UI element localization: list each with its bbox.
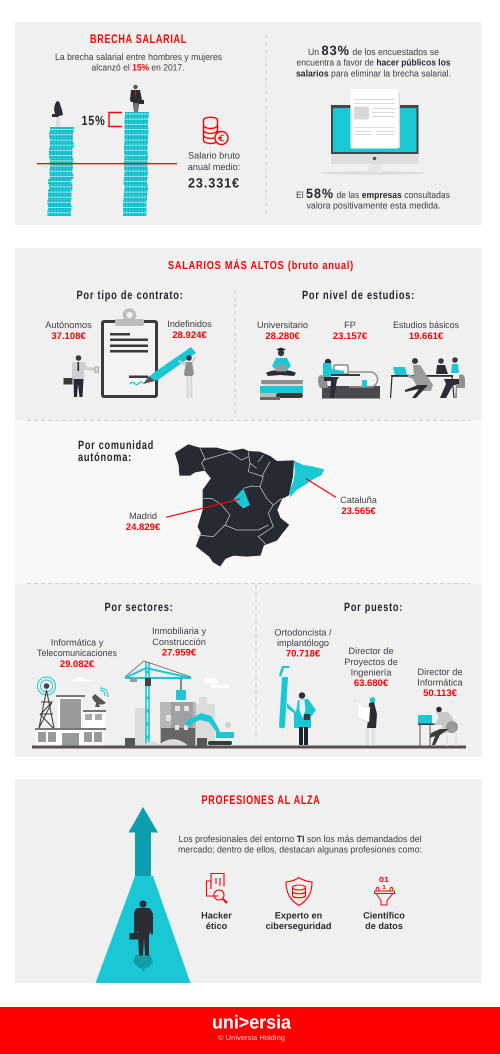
label: ortodoncista [274,628,332,660]
label: FP: FP [344,320,356,330]
text block: profesionales TI: mercado; dentro de ellos, destacan algunas profesiones como: [178,844,422,854]
logo: universia: uni>ersia [212,1012,291,1034]
text block: profesionales TI [178,834,422,854]
label: experto en ciberseguridad [266,910,331,931]
label: director de proyectos: Ingeniería [351,668,392,678]
label: ortodoncista: implantólogo [277,638,329,648]
panel: por comunidad autónoma [15,420,482,584]
text block: 83% encuestados [296,43,451,78]
icon: man with document [64,355,98,397]
arrow: up arrow with light cone [96,807,190,983]
icon: man on stack [130,85,144,112]
icon: clipboard with pen [102,310,196,396]
heading: por comunidad autónoma [78,438,154,464]
heading: por comunidad autónoma: autónoma: [78,450,132,464]
heading: profesiones al alza: PROFESIONES AL ALZA [202,793,320,807]
text block: salario bruto anual medio: Salario bruto [188,150,240,160]
label: experto en ciberseguridad: ciberseguridad [266,921,331,931]
label: universitario: 28.280€ [265,331,300,342]
label: estudios básicos: Estudios básicos [393,320,459,330]
label: indefinidos: 28.924€ [172,330,207,341]
label: ortodoncista: 70.718€ [286,648,321,660]
label: indefinidos [167,319,212,341]
text block: 83% encuestados: encuentra a favor de hacer públicos los [296,58,451,68]
label: Cataluña: 23.565€ [341,506,376,517]
label: autónomos: Autónomos [45,320,92,330]
text block: brecha intro: La brecha salarial entre hombres y mujeres [55,52,222,62]
label: Madrid: 24.829€ [126,522,161,533]
map: Spain [166,445,336,566]
label: informática y telecomunicaciones: Telecomunicaciones [37,648,117,658]
icon: crane and construction [125,661,234,746]
icon: man with briefcase [130,900,153,972]
label: científico de datos: de datos [365,921,403,931]
label: Madrid: Madrid [129,511,157,521]
text block: 83% encuestados: Un 83% de los encuestados se [308,43,439,58]
heading: por nivel de estudios: Por nivel de estudios: [302,288,415,302]
heading: por comunidad autónoma: Por comunidad [78,438,154,452]
label: hacker ético [201,910,232,931]
heading: brecha salarial: BRECHA SALARIAL [90,32,187,46]
text block: brecha intro [55,52,222,72]
text block: 58% empresas: El 58% de las empresas consultadas [296,186,450,201]
label: estudios básicos: 19.661€ [409,331,444,342]
label: hacker ético: ético [206,921,228,931]
panel: profesiones al alza [15,779,482,983]
icon: científico de datos funnel: 1 [382,884,386,891]
label: informática y telecomunicaciones [37,638,117,670]
label: director de proyectos [344,646,398,689]
icon: student on books [260,348,303,400]
text block: salario bruto anual medio: 23.331€ [188,176,240,190]
label: Cataluña [340,495,378,517]
icon: monitor with document [320,89,424,175]
label: FP: 23.157€ [333,331,368,342]
chart: coin stacks [37,112,177,216]
icon: FP student at desk [318,359,380,398]
label: inmobiliaria y construcción: Construcción [152,637,206,647]
label: Cataluña: Cataluña [340,495,378,505]
heading: por sectores: Por sectores: [104,600,174,614]
arrow: Madrid leader [166,499,240,517]
icon: group at table [390,357,465,398]
label: experto en ciberseguridad: Experto en [275,910,323,920]
callout: 15% difference: 15% [82,113,106,128]
label: director de informática [417,667,464,699]
text block: 58% empresas [296,186,450,210]
icon: telecom building [35,677,108,746]
text block: salario bruto anual medio [188,150,240,190]
label: autónomos: 37.108€ [51,331,86,342]
label: científico de datos: Científico [363,910,405,920]
heading: por tipo de contrato: Por tipo de contrato: [76,288,184,302]
label: inmobiliaria y construcción: 27.959€ [162,648,197,658]
icon: IT director at laptop [418,707,458,746]
label: estudios básicos [393,320,459,342]
arrow: Cataluña leader [306,479,336,497]
label: hacker ético: Hacker [201,910,232,920]
label: ortodoncista: Ortodoncista / [274,628,332,638]
icon: hacker ético [206,874,227,903]
label: inmobiliaria y construcción [152,626,206,658]
label: autónomos [45,320,92,342]
label: informática y telecomunicaciones: Informática y [51,638,104,648]
panel: brecha salarial [15,22,482,225]
label: inmobiliaria y construcción: Inmobiliaria y [152,626,206,636]
label: indefinidos: Indefinidos [167,319,212,329]
text block: profesionales TI: Los profesionales del entorno TI son los más demandados del [178,834,422,844]
footer [0,1007,500,1054]
icon: woman on stack [52,101,63,127]
icon: orthodontist with tooth tool [279,666,316,745]
label: científico de datos [363,910,405,931]
label: director de informática: Director de [418,667,462,677]
heading: por puesto: Por puesto: [344,600,403,614]
heading: salarios más altos: SALARIOS MÁS ALTOS (bruto anual) [168,258,354,272]
icon: ciberseguridad shield [286,878,312,906]
label: FP [333,320,368,342]
icon: engineer with plans [355,697,377,745]
icon: científico de datos funnel: 01 [379,875,389,884]
text block: 58% empresas: valora positivamente esta medida. [306,200,440,210]
label: universitario [257,320,308,342]
label: director de proyectos: 63.680€ [354,678,389,689]
region: Madrid [233,488,250,508]
label: director de informática: 50.113€ [423,688,458,699]
panel: sectores y puesto [15,584,482,757]
label: Madrid [126,511,161,533]
label: informática y telecomunicaciones: 29.082€ [60,659,95,670]
text block: 83% encuestados: salarios para eliminar la brecha salarial. [296,68,451,78]
text block: salario bruto anual medio: anual medio: [188,162,240,172]
text block: brecha intro: alcanzó el 15% en 2017. [92,62,184,72]
icon: científico de datos funnel [374,875,394,905]
label: director de proyectos: Director de [349,646,393,656]
label: director de proyectos: Proyectos de [344,657,398,667]
text block: copyright: © Universia Holding [218,1033,285,1042]
panel: salarios más altos [15,248,482,420]
icon: woman holding pen [178,355,196,398]
label: universitario: Universitario [257,320,308,330]
label: director de informática: Informática [417,678,464,688]
icon: euro coins [204,117,228,144]
region: Cataluña [289,461,324,497]
